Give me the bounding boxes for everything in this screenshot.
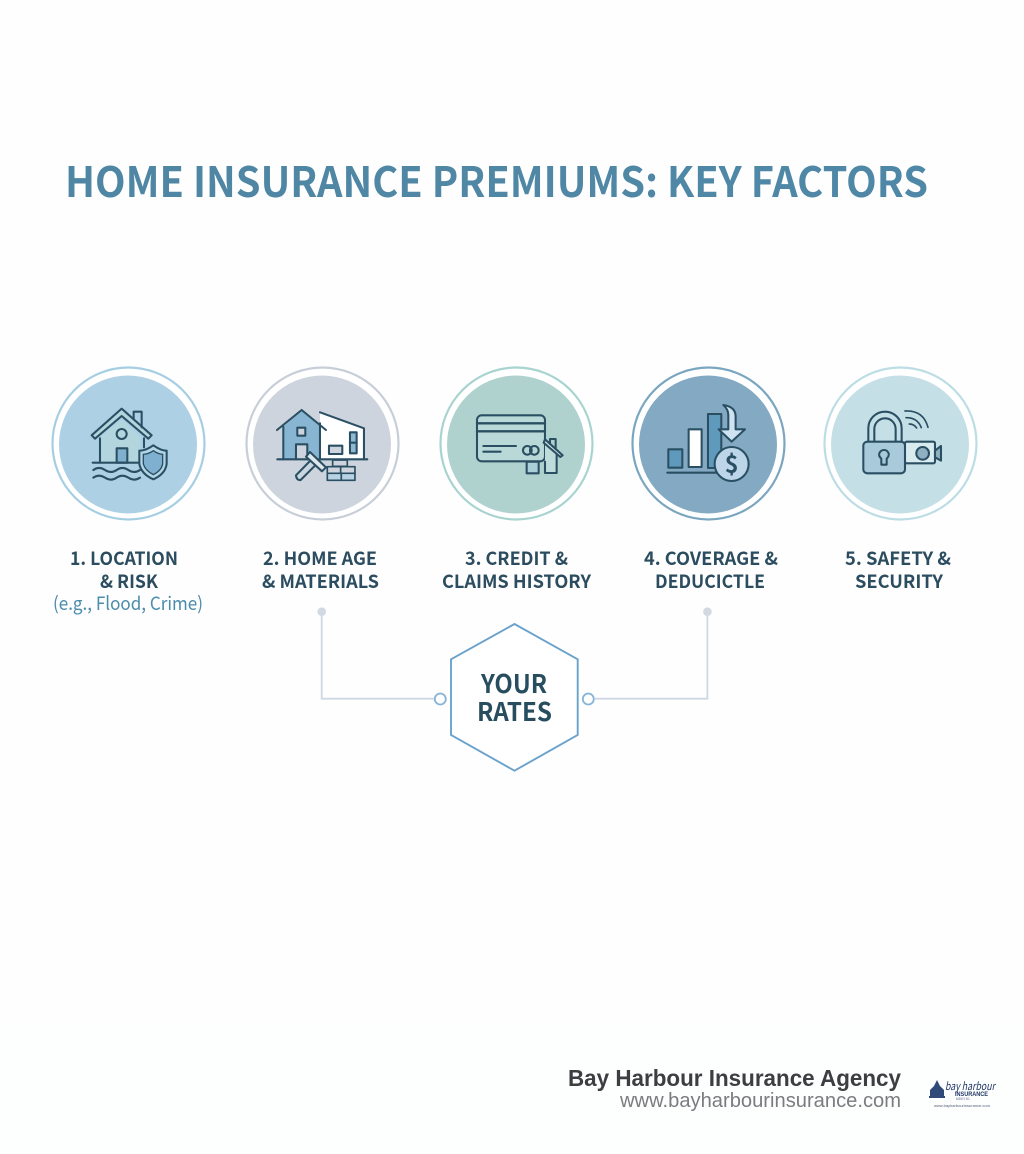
factor 2 badge: home age and materials	[246, 368, 398, 520]
label 2: home age and materials: & MATERIALS	[262, 568, 379, 594]
icon: credit card with house	[477, 415, 563, 473]
footer logo: INSURANCE	[955, 1092, 988, 1098]
label 2: home age and materials: 2. HOME AGE	[263, 545, 377, 571]
title: HOME INSURANCE PREMIUMS: KEY FACTORS	[65, 149, 928, 210]
footer logo: bay harbour	[945, 1078, 996, 1094]
label 3: credit and claims history: 3. CREDIT &	[465, 545, 568, 571]
footer agency text: Bay Harbour Insurance Agency	[568, 1065, 901, 1091]
label 3: credit and claims history: CLAIMS HISTORY	[442, 568, 591, 594]
label 5: safety and security: SECURITY	[855, 568, 943, 594]
label 1: location and risk: 1. LOCATION	[70, 545, 178, 571]
hexagon: your rates	[451, 624, 578, 771]
label 1: location and risk	[53, 545, 203, 616]
footer logo	[929, 1078, 996, 1108]
icon: old and new house with hammer and bricks	[277, 410, 367, 480]
connector left	[317, 607, 446, 704]
factor 1 badge: location and risk	[52, 368, 204, 520]
label 2: home age and materials	[262, 545, 379, 594]
label 1: location and risk: (e.g., Flood, Crime)	[53, 590, 203, 616]
icon: bar chart with down arrow and dollar coin: $	[725, 446, 739, 480]
label 3: credit and claims history	[442, 545, 591, 594]
factor 5 badge: safety and security	[824, 368, 976, 520]
icon: house with flood waves and shield	[92, 409, 167, 480]
label 4: coverage and deductible: DEDUCICTLE	[655, 568, 765, 594]
hexagon: your rates: YOUR	[480, 664, 547, 701]
icon: padlock with security camera	[863, 411, 941, 473]
footer agency text	[568, 1065, 901, 1112]
label 5: safety and security: 5. SAFETY &	[845, 545, 951, 571]
connector right	[583, 607, 712, 704]
factor 4 badge: coverage and deductible	[632, 368, 784, 520]
hexagon: your rates: RATES	[477, 692, 552, 729]
label 1: location and risk: & RISK	[100, 568, 158, 594]
label 4: coverage and deductible: 4. COVERAGE &	[644, 545, 778, 571]
label 4: coverage and deductible	[644, 545, 778, 594]
label 5: safety and security	[845, 545, 951, 594]
factor 3 badge: credit and claims history	[440, 368, 592, 520]
footer logo: www.bayharbourinsurance.com	[934, 1104, 990, 1108]
icon: bar chart with down arrow and dollar coin	[667, 405, 749, 481]
footer logo: AGENCY, INC.	[956, 1097, 970, 1101]
footer agency text: www.bayharbourinsurance.com	[619, 1090, 901, 1112]
